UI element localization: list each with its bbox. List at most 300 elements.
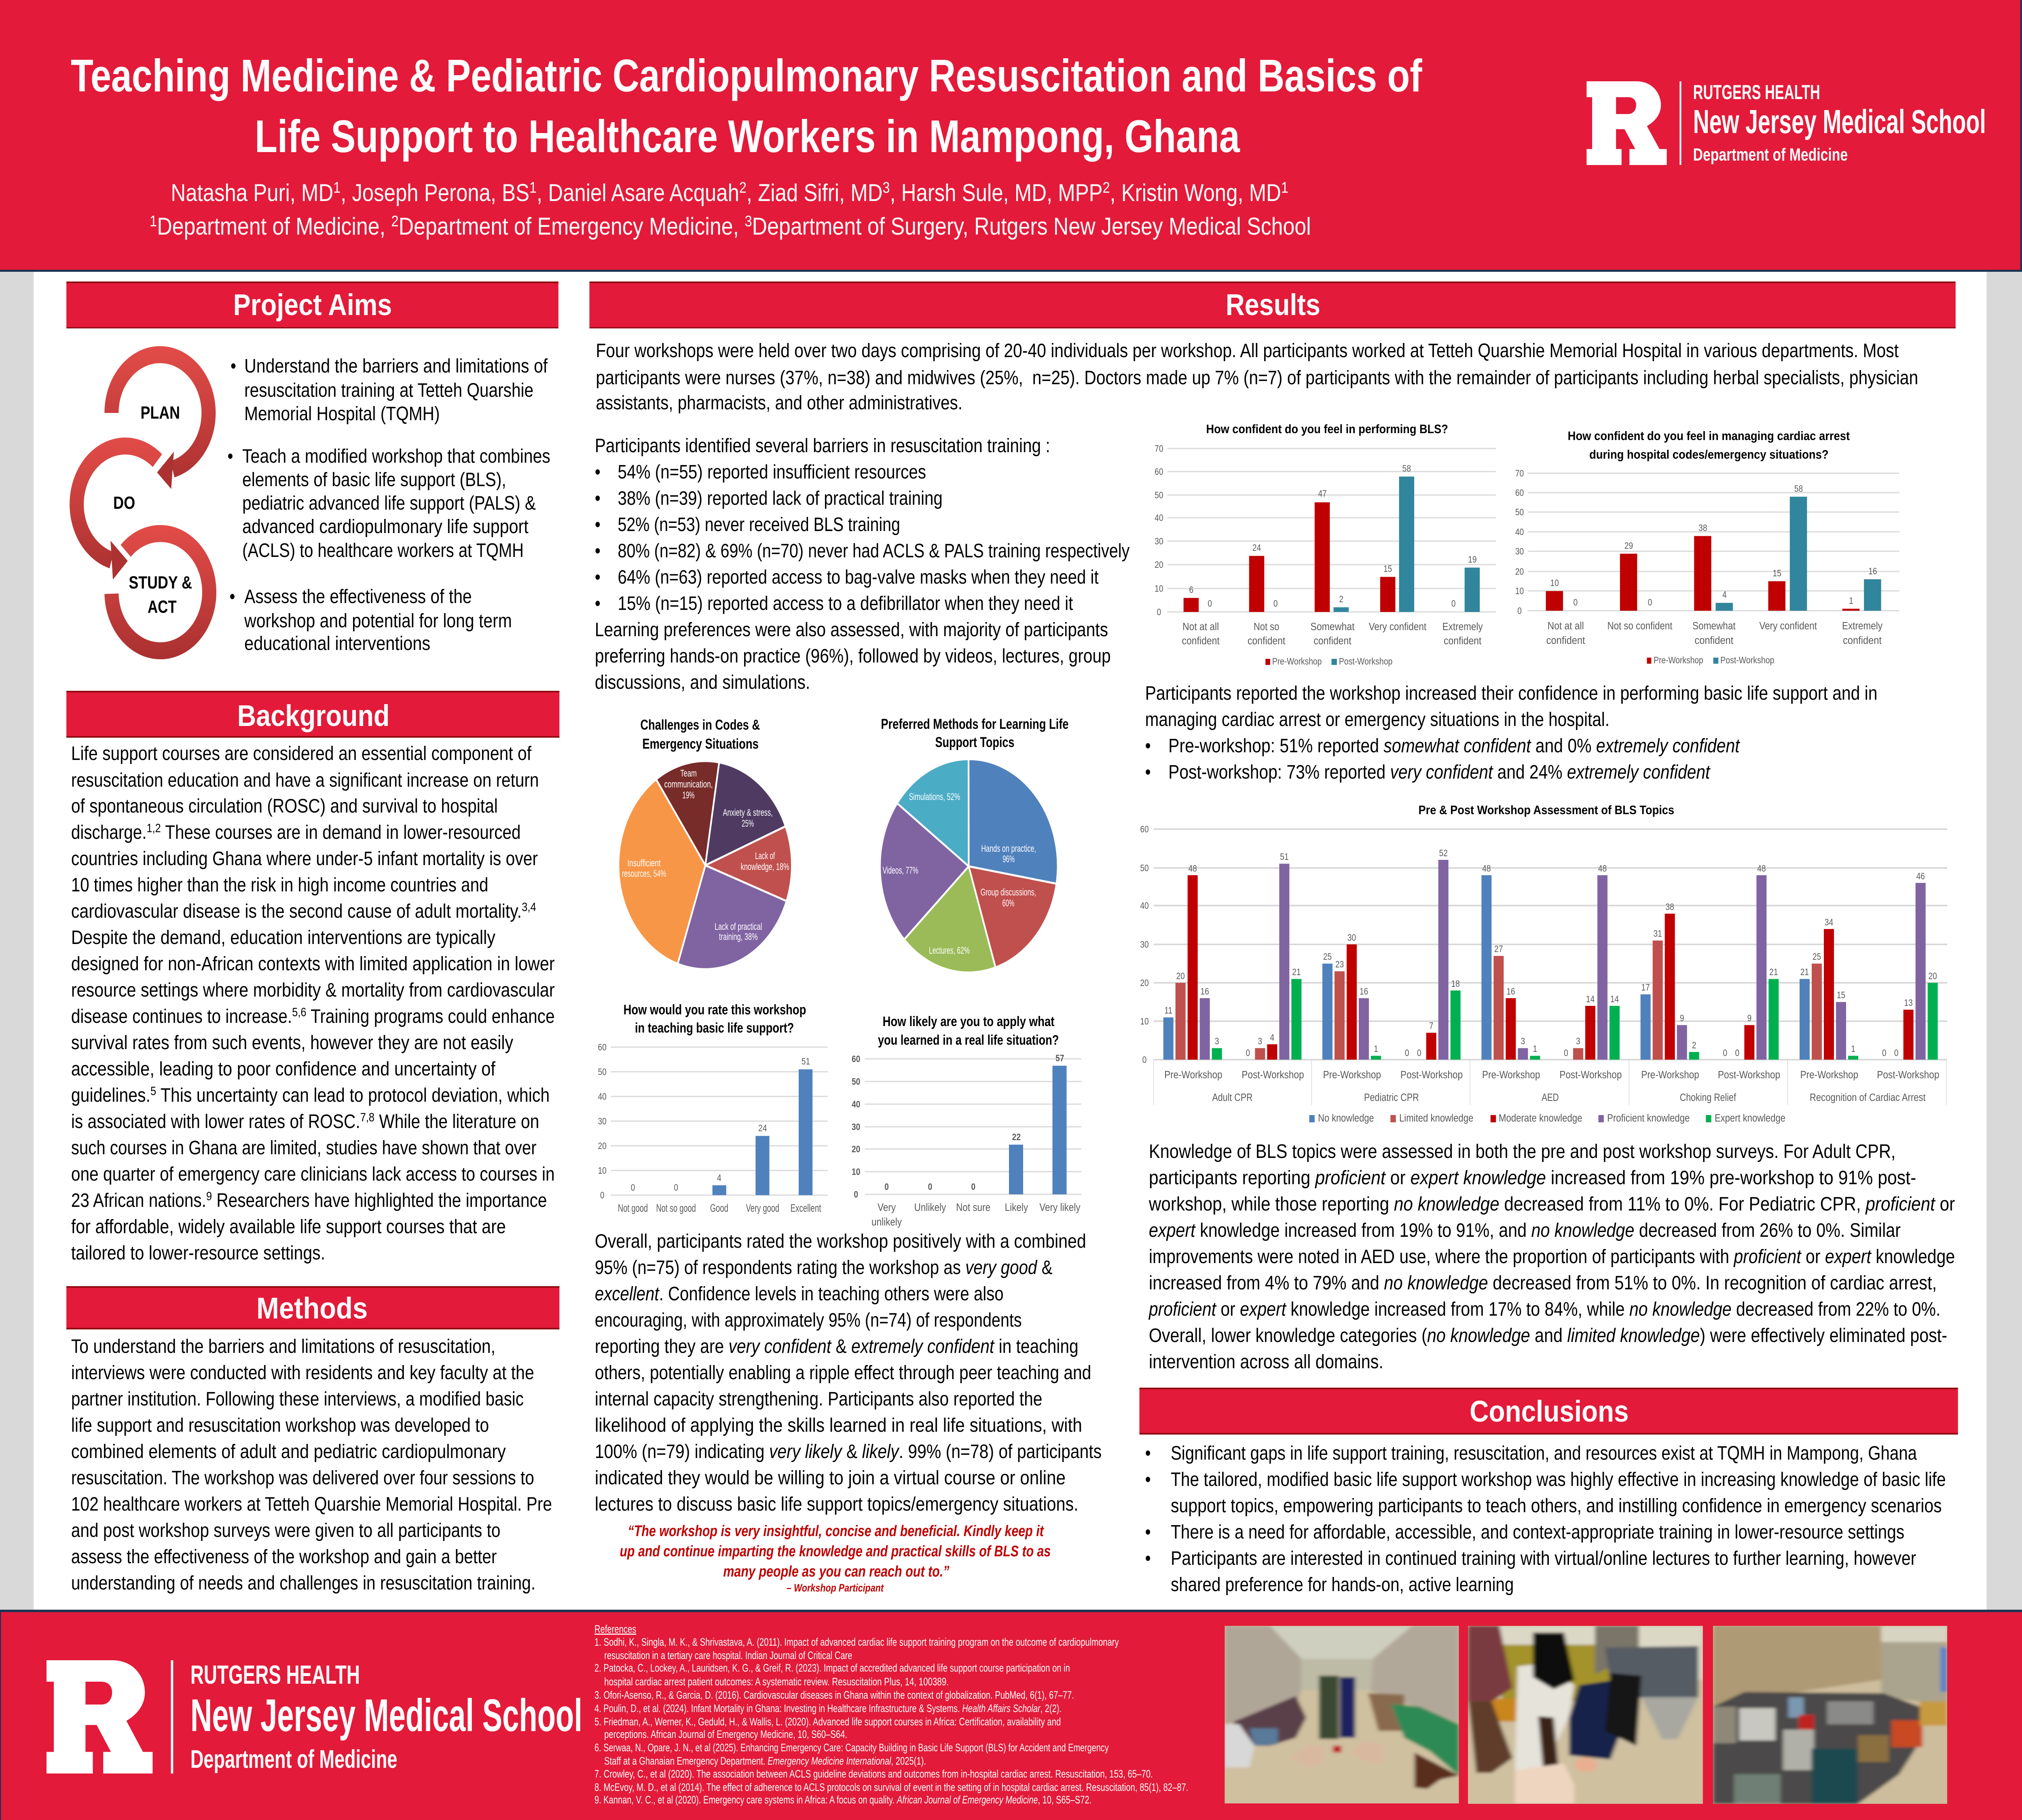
diagram: plan do study act cycle: STUDY & <box>129 572 192 593</box>
bar chart: pre and post assessment of BLS topics: 21 <box>1800 967 1809 977</box>
results intro text: assistants, pharmacists, and other administratives. <box>596 392 962 414</box>
bar chart: workshop rating: 10 <box>598 1166 607 1176</box>
bar chart: pre and post assessment of BLS topics: 3 <box>1576 1036 1580 1046</box>
background text: for affordable, widely available life support courses that are <box>71 1216 506 1238</box>
bar chart: pre and post assessment of BLS topics: 0 <box>1723 1048 1727 1058</box>
bar chart: pre and post assessment of BLS topics: 48 <box>1757 863 1766 874</box>
background text: resource settings where morbidity & mortality from cardiovascular <box>71 980 555 1001</box>
barriers list: • <box>595 593 601 614</box>
bar chart: pre and post assessment of BLS topics: Pre-Workshop <box>1482 1069 1540 1081</box>
knowledge assessment text: expert knowledge increased from 19% to 91%, and no knowledge decreased from 26% to 0%. Similar <box>1149 1220 1901 1241</box>
barriers list: • <box>595 567 601 588</box>
workshop rating text: likelihood of applying the skills learned in real life situations, with <box>595 1415 1082 1436</box>
bar chart: workshop rating: 0 <box>631 1183 635 1193</box>
bar chart: confidence performing BLS: How confident do you feel in performing BLS? <box>1206 422 1448 436</box>
bar chart: confidence performing BLS: Pre-Workshop <box>1272 656 1322 667</box>
panel: methods <box>66 1286 559 1594</box>
bar chart: confidence performing BLS: Very confident <box>1369 621 1426 633</box>
barriers list: 52% (n=53) never received BLS training <box>618 514 900 535</box>
workshop rating text: 100% (n=79) indicating very likely & likely. 99% (n=78) of participants <box>595 1441 1102 1462</box>
background text: tailored to lower-resource settings. <box>71 1242 325 1264</box>
aims bullet list: (ACLS) to healthcare workers at TQMH <box>242 540 524 561</box>
methods text: 102 healthcare workers at Tetteh Quarshie Memorial Hospital. Pre <box>71 1494 552 1515</box>
bar chart: pre and post assessment of BLS topics: 31 <box>1654 929 1662 939</box>
confidence text: Pre-workshop: 51% reported somewhat confident and 0% extremely confident <box>1168 735 1740 757</box>
bar chart: pre and post assessment of BLS topics: 1 <box>1533 1044 1537 1054</box>
photo: participants seated in training room <box>1713 1626 1947 1804</box>
bar chart: workshop rating: 4 <box>717 1173 721 1183</box>
knowledge assessment text: Overall, lower knowledge categories ( no knowledge and limited knowledge) were effectively eliminated post- <box>1149 1325 1947 1346</box>
workshop rating text: 95% (n=75) of respondents rating the workshop as very good & <box>595 1257 1052 1278</box>
diagram: plan do study act cycle: PLAN <box>141 402 180 423</box>
bar chart: confidence performing BLS: 50 <box>1155 490 1163 500</box>
workshop rating text: reporting they are very confident & extremely confident in teaching <box>595 1336 1079 1357</box>
background text: Life support courses are considered an essential component of <box>71 743 532 764</box>
bar chart: pre and post assessment of BLS topics: Moderate knowledge <box>1499 1112 1582 1124</box>
bar chart: likelihood to apply: 22 <box>1012 1132 1021 1142</box>
bar chart: pre and post assessment of BLS topics: 9 <box>1680 1013 1684 1023</box>
references: 9. Kannan, V. C., et al (2020). Emergency care systems in Africa: A focus on quality. African Journal of Emergency Medicine, 10, S65–S72. <box>594 1794 1091 1806</box>
bar chart: likelihood to apply: Likely <box>1005 1202 1028 1214</box>
bar chart: pre and post assessment of BLS topics: 40 <box>1140 901 1149 911</box>
bar chart: pre and post assessment of BLS topics: Pre & Post Workshop Assessment of BLS Topics <box>1419 803 1674 817</box>
bar chart: confidence managing cardiac arrest: 15 <box>1773 568 1781 578</box>
bar chart: pre and post assessment of BLS topics: 1 <box>1851 1044 1855 1054</box>
bar chart: pre and post assessment of BLS topics: 0 <box>1735 1048 1739 1058</box>
bar chart: pre and post assessment of BLS topics: 16 <box>1201 986 1209 997</box>
bar chart: likelihood to apply: 30 <box>852 1122 860 1132</box>
aims bullet list: workshop and potential for long term <box>244 610 512 632</box>
references: References <box>594 1623 636 1636</box>
references: resuscitation in a tertiary care hospital. Indian Journal of Critical Care <box>604 1650 852 1662</box>
panel: project aims <box>66 281 558 654</box>
bar chart: pre and post assessment of BLS topics: 3 <box>1215 1036 1219 1046</box>
pie chart: challenges in codes and emergency situations: Anxiety & stress, <box>723 807 773 818</box>
bar chart: likelihood to apply: 60 <box>852 1054 860 1064</box>
bar chart: confidence managing cardiac arrest: Not at all <box>1548 620 1584 632</box>
bar chart: likelihood to apply: Very <box>878 1202 896 1214</box>
pie chart: challenges in codes and emergency situations: Emergency Situations <box>642 736 759 752</box>
bar chart: pre and post assessment of BLS topics: 48 <box>1189 863 1197 874</box>
bar chart: pre and post assessment of BLS topics: No knowledge <box>1318 1112 1374 1124</box>
participant quote: – Workshop Participant <box>787 1582 884 1594</box>
knowledge assessment text: improvements were noted in AED use, where the proportion of participants with proficient or expert knowledge <box>1149 1246 1955 1268</box>
bar chart: likelihood to apply: 57 <box>1055 1053 1064 1063</box>
bar chart: confidence managing cardiac arrest: 58 <box>1794 484 1803 494</box>
bar chart: likelihood to apply: 40 <box>852 1099 860 1109</box>
bar chart: confidence performing BLS: Post-Workshop <box>1339 656 1392 667</box>
bar chart: confidence performing BLS: Somewhat <box>1310 621 1355 633</box>
bar chart: workshop rating: 30 <box>598 1116 607 1126</box>
bar chart: likelihood to apply: you learned in a real life situation? <box>878 1033 1059 1048</box>
bar chart: pre and post assessment of BLS topics: Limited knowledge <box>1399 1112 1473 1124</box>
bar chart: pre and post assessment of BLS topics: 14 <box>1586 994 1595 1004</box>
references: Staff at a Ghanaian Emergency Department. Emergency Medicine International, 2025(1). <box>604 1755 926 1767</box>
bar chart: likelihood to apply: 0 <box>928 1182 932 1192</box>
bar chart: likelihood to apply: How likely are you to apply what <box>883 1014 1055 1029</box>
bar chart: confidence managing cardiac arrest: 0 <box>1574 597 1578 607</box>
bar chart: pre and post assessment of BLS topics: 0 <box>1417 1048 1421 1058</box>
pie chart: challenges in codes and emergency situations: training, 38% <box>719 931 758 942</box>
bar chart: confidence managing cardiac arrest: 29 <box>1624 541 1633 551</box>
bar chart: confidence performing BLS: confident <box>1182 635 1220 647</box>
logo: Rutgers Health header <box>1586 80 1986 165</box>
aims bullet list: educational interventions <box>244 633 430 654</box>
references <box>594 1623 1188 1806</box>
bar chart: workshop rating: Excellent <box>791 1202 821 1215</box>
barriers list: Learning preferences were also assessed, with majority of participants <box>595 619 1108 641</box>
methods text: understanding of needs and challenges in resuscitation training. <box>71 1572 535 1594</box>
bar chart: pre and post assessment of BLS topics: 7 <box>1429 1021 1434 1031</box>
bar chart: confidence performing BLS: confident <box>1313 635 1352 647</box>
bar chart: pre and post assessment of BLS topics: Expert knowledge <box>1715 1112 1785 1124</box>
bar chart: pre and post assessment of BLS topics: Proficient knowledge <box>1607 1112 1690 1124</box>
bar chart: confidence performing BLS: 20 <box>1155 560 1163 570</box>
background text: of spontaneous circulation (ROSC) and survival to hospital <box>71 796 498 817</box>
background text: designed for non-African contexts with limited application in lower <box>71 953 555 975</box>
bar chart: pre and post assessment of BLS topics: Pediatric CPR <box>1364 1092 1419 1104</box>
knowledge assessment text: intervention across all domains. <box>1149 1351 1383 1373</box>
bar chart: confidence performing BLS: 0 <box>1273 599 1277 609</box>
bar chart: workshop rating: 50 <box>598 1067 607 1077</box>
bar chart: workshop rating: 51 <box>802 1056 810 1067</box>
bar chart: likelihood to apply: 0 <box>854 1189 858 1200</box>
knowledge assessment text: increased from 4% to 79% and no knowledge decreased from 51% to 0%. In recognition of cardiac arrest, <box>1149 1272 1937 1294</box>
conclusions bullets: There is a need for affordable, accessible, and context-appropriate training in lower-resource settings <box>1171 1522 1904 1543</box>
bar chart: confidence managing cardiac arrest: 16 <box>1868 566 1877 576</box>
results intro text <box>596 340 1918 414</box>
logo: Rutgers Health footer: RUTGERS HEALTH <box>190 1660 360 1689</box>
pie chart: preferred methods for learning: Group discussions, <box>981 887 1036 897</box>
title: Life Support to Healthcare Workers in Mampong, Ghana <box>255 111 1240 162</box>
pie chart: challenges in codes and emergency situations: Lack of <box>755 850 775 861</box>
pie chart: preferred methods for learning: Videos, 77% <box>883 865 918 876</box>
bar chart: pre and post assessment of BLS topics: 3 <box>1258 1036 1262 1046</box>
bar chart: pre and post assessment of BLS topics: 20 <box>1929 971 1937 981</box>
aims bullet list: Teach a modified workshop that combines <box>242 446 550 467</box>
logo: Rutgers Health header: RUTGERS HEALTH <box>1693 80 1820 104</box>
background text: Despite the demand, education interventions are typically <box>71 927 495 948</box>
heading: project aims: Project Aims <box>233 288 392 322</box>
diagram: plan do study act cycle: ACT <box>148 597 177 617</box>
bar chart: pre and post assessment of BLS topics: 51 <box>1280 852 1288 862</box>
background text: discharge.1,2 These courses are in demand in lower-resourced <box>71 821 521 843</box>
conclusions bullets: The tailored, modified basic life support workshop was highly effective in increasing knowledge of basic life <box>1171 1469 1946 1490</box>
background text: guidelines.5 This uncertainty can lead to protocol deviation, which <box>71 1084 550 1106</box>
barriers list: 38% (n=39) reported lack of practical training <box>618 488 943 509</box>
bar chart: confidence performing BLS <box>1155 422 1496 667</box>
heading: results <box>590 281 1956 328</box>
bar chart: pre and post assessment of BLS topics: Recognition of Cardiac Arrest <box>1810 1092 1926 1104</box>
bar chart: pre and post assessment of BLS topics: 13 <box>1904 998 1913 1008</box>
pie chart: challenges in codes and emergency situations: communication, <box>664 779 713 789</box>
workshop rating text: others, potentially enabling a ripple effect through peer teaching and <box>595 1362 1091 1384</box>
bar chart: confidence managing cardiac arrest: 0 <box>1517 606 1522 616</box>
aims bullet list: Assess the effectiveness of the <box>244 586 472 607</box>
knowledge assessment text <box>1148 1141 1955 1373</box>
bar chart: confidence managing cardiac arrest <box>1515 429 1899 665</box>
references: hospital cardiac arrest patient outcomes: A systematic review. Resuscitation Plus, 14, 100389. <box>604 1676 949 1688</box>
bar chart: confidence performing BLS: Extremely <box>1442 621 1483 633</box>
bar chart: confidence performing BLS: 24 <box>1252 543 1261 553</box>
pie chart: challenges in codes and emergency situations: knowledge, 18% <box>741 861 789 872</box>
heading: background <box>66 691 559 738</box>
bar chart: pre and post assessment of BLS topics: 48 <box>1598 863 1607 874</box>
bar chart: pre and post assessment of BLS topics: 9 <box>1747 1013 1751 1023</box>
pie chart: preferred methods for learning: Simulations, 52% <box>909 791 960 802</box>
pie chart: preferred methods for learning: 96% <box>1003 853 1015 864</box>
pie chart: challenges in codes and emergency situations: Insufficient <box>627 857 661 868</box>
barriers list: 15% (n=15) reported access to a defibrillator when they need it <box>618 593 1073 614</box>
bar chart: pre and post assessment of BLS topics: 4 <box>1270 1033 1274 1043</box>
heading: results: Results <box>1226 288 1320 322</box>
bar chart: confidence managing cardiac arrest: 38 <box>1698 523 1707 533</box>
bar chart: pre and post assessment of BLS topics: 30 <box>1347 933 1356 943</box>
photo: workshop room with participants <box>1225 1626 1459 1803</box>
bar chart: pre and post assessment of BLS topics: AED <box>1542 1092 1559 1104</box>
bar chart: workshop rating: 60 <box>598 1042 607 1052</box>
title: Teaching Medicine & Pediatric Cardiopulmonary Resuscitation and Basics of <box>71 51 1422 102</box>
bar chart: pre and post assessment of BLS topics: 0 <box>1894 1048 1899 1058</box>
pie chart: preferred methods for learning: Preferred Methods for Learning Life <box>881 716 1069 732</box>
references: 5. Friedman, A., Werner, K., Geduld, H., & Wallis, L. (2020). Advanced life support courses in Africa: Certification, availability and <box>594 1716 1061 1728</box>
confidence text: Participants reported the workshop increased their confidence in performing basic life support and in <box>1145 683 1877 704</box>
pie chart: preferred methods for learning: Support Topics <box>935 734 1014 750</box>
knowledge assessment text: workshop, while those reporting no knowledge decreased from 11% to 0%. For Pediatric CPR, proficient or <box>1148 1194 1955 1215</box>
workshop rating text: encouraging, with approximately 95% (n=74) of respondents <box>595 1310 1022 1331</box>
bar chart: pre and post assessment of BLS topics: 38 <box>1666 902 1674 912</box>
references: 6. Serwaa, N., Opare, J. N., et al (2025). Enhancing Emergency Care: Capacity Building in Basic Life Support (BLS) for Accident and Emergency <box>594 1742 1109 1754</box>
bar chart: confidence performing BLS: 19 <box>1468 554 1476 565</box>
conclusions bullets: • <box>1145 1548 1151 1569</box>
bar chart: confidence managing cardiac arrest: 0 <box>1648 597 1652 607</box>
barriers list: • <box>595 461 601 483</box>
bar chart: pre and post assessment of BLS topics: 21 <box>1292 967 1301 977</box>
bar chart: confidence managing cardiac arrest: during hospital codes/emergency situations? <box>1589 448 1829 462</box>
conclusions bullets: Participants are interested in continued training with virtual/online lectures to further learning, however <box>1171 1548 1916 1569</box>
bar chart: workshop rating: 20 <box>598 1141 607 1151</box>
heading: methods <box>66 1286 559 1329</box>
pie chart: challenges in codes and emergency situations: Team <box>680 768 697 779</box>
bar chart: confidence managing cardiac arrest: 50 <box>1515 507 1524 517</box>
pie chart: preferred methods for learning: 60% <box>1002 897 1014 908</box>
bar chart: pre and post assessment of BLS topics: 30 <box>1140 940 1149 950</box>
aims bullet list: • <box>231 356 236 377</box>
methods text: assess the effectiveness of the workshop and gain a better <box>71 1546 497 1568</box>
aims bullet list: Memorial Hospital (TQMH) <box>244 403 440 425</box>
bar chart: confidence managing cardiac arrest: Not so confident <box>1607 620 1673 632</box>
bar chart: confidence managing cardiac arrest: Somewhat <box>1692 620 1736 632</box>
bar chart: pre and post assessment of BLS topics: 48 <box>1482 863 1491 874</box>
barriers list: preferring hands-on practice (96%), followed by videos, lectures, group <box>595 645 1111 667</box>
bar chart: confidence managing cardiac arrest: 60 <box>1515 488 1524 498</box>
bar chart: pre and post assessment of BLS topics: 17 <box>1641 982 1650 993</box>
bar chart: workshop rating: Not so good <box>656 1202 696 1215</box>
references: perceptions. African Journal of Emergency Medicine, 10, S60–S64. <box>604 1729 847 1741</box>
diagram: plan do study act cycle <box>77 355 209 651</box>
barriers list: 80% (n=82) & 69% (n=70) never had ACLS & PALS training respectively <box>618 540 1129 562</box>
bar chart: confidence performing BLS: 0 <box>1157 607 1161 617</box>
bar chart: confidence performing BLS: 70 <box>1155 444 1163 454</box>
header banner <box>0 0 2022 272</box>
bar chart: pre and post assessment of BLS topics: 50 <box>1140 863 1149 873</box>
bar chart: confidence performing BLS: 15 <box>1383 564 1392 574</box>
logo: Rutgers Health footer: New Jersey Medical School <box>190 1690 582 1741</box>
methods text: To understand the barriers and limitations of resuscitation, <box>71 1336 495 1357</box>
references: 8. McEvoy, M. D., et al (2014). The effect of adherence to ACLS protocols on survival of event in the setting of in hospital cardiac arrest. Resuscitation, 85(1), 82–87. <box>594 1782 1188 1794</box>
pie chart: preferred methods for learning: Hands on practice, <box>981 843 1036 854</box>
results intro text: participants were nurses (37%, n=38) and midwives (25%, n=25). Doctors made up 7% (n=7) of participants with the remainder of participants including herbal specialists, physician <box>596 367 1918 389</box>
bar chart: likelihood to apply: Not sure <box>956 1202 990 1214</box>
participant quote: “The workshop is very insightful, concise and beneficial. Kindly keep it <box>628 1522 1044 1540</box>
bar chart: pre and post assessment of BLS topics: 1 <box>1374 1044 1378 1054</box>
confidence text: managing cardiac arrest or emergency situations in the hospital. <box>1145 709 1610 730</box>
authors and affiliations: Natasha Puri, MD1, Joseph Perona, BS1, Daniel Asare Acquah2, Ziad Sifri, MD3, Harsh Sule, MD, MPP2, Kristin Wong, MD1 <box>171 179 1288 206</box>
bar chart: confidence managing cardiac arrest: Post-Workshop <box>1720 655 1775 665</box>
bar chart: confidence performing BLS: 30 <box>1155 536 1163 546</box>
knowledge assessment text: proficient or expert knowledge increased from 17% to 84%, while no knowledge decreased from 22% to 0%. <box>1148 1299 1940 1320</box>
panel: background <box>66 691 559 1264</box>
knowledge assessment text: participants reporting proficient or expert knowledge increased from 19% pre-workshop to 91% post- <box>1149 1167 1916 1189</box>
bar chart: likelihood to apply: Unlikely <box>914 1202 946 1214</box>
references: 7. Crowley, C., et al (2020). The association between ACLS guideline deviations and outcomes from in-hospital cardiac arrest. Resuscitation, 153, 65–70. <box>594 1768 1153 1780</box>
references: 3. Ofori-Asenso, R., & Garcia, D. (2016). Cardiovascular diseases in Ghana within the context of globalization. PubMed, 6(1), 67–77. <box>594 1689 1074 1701</box>
pie chart: preferred methods for learning: Lectures, 62% <box>929 945 970 956</box>
bar chart: pre and post assessment of BLS topics: Post-Workshop <box>1559 1069 1622 1081</box>
barriers list: 64% (n=63) reported access to bag-valve masks when they need it <box>618 567 1099 588</box>
bar chart: confidence managing cardiac arrest: 10 <box>1550 578 1559 588</box>
bar chart: pre and post assessment of BLS topics: 34 <box>1825 917 1833 927</box>
bar chart: pre and post assessment of BLS topics: 21 <box>1769 967 1778 977</box>
bar chart: confidence managing cardiac arrest: 4 <box>1722 590 1727 600</box>
pie chart: challenges in codes and emergency situations: Challenges in Codes & <box>640 717 760 733</box>
bar chart: pre and post assessment of BLS topics: 27 <box>1494 944 1503 954</box>
barriers list: • <box>595 540 601 562</box>
logo: Rutgers Health footer: Department of Medicine <box>190 1746 398 1773</box>
workshop rating text: Overall, participants rated the workshop positively with a combined <box>595 1231 1086 1252</box>
bar chart: confidence managing cardiac arrest: 1 <box>1849 596 1853 606</box>
bar chart: pre and post assessment of BLS topics: 52 <box>1439 848 1448 858</box>
bar chart: pre and post assessment of BLS topics: 0 <box>1564 1048 1568 1058</box>
authors and affiliations: 1Department of Medicine, 2Department of Emergency Medicine, 3Department of Surgery, Rutgers New Jersey Medical School <box>150 212 1311 240</box>
background text: accessible, leading to poor confidence and uncertainty of <box>71 1058 496 1080</box>
bar chart: confidence managing cardiac arrest: Pre-Workshop <box>1654 655 1703 665</box>
barriers list: • <box>595 488 601 509</box>
background text: such courses in Ghana are limited, studies have shown that over <box>71 1137 537 1159</box>
confidence text: • <box>1145 762 1151 783</box>
background text: resuscitation education and have a significant increase on return <box>71 770 539 791</box>
bar chart: confidence performing BLS: 58 <box>1402 463 1411 474</box>
conclusions bullets <box>1145 1443 1946 1596</box>
bar chart: confidence performing BLS: 0 <box>1208 599 1212 609</box>
background text: disease continues to increase. 5,6 Training programs could enhance <box>71 1005 555 1027</box>
methods text <box>71 1336 552 1594</box>
bar chart: pre and post assessment of BLS topics: 2 <box>1692 1040 1696 1050</box>
bar chart: pre and post assessment of BLS topics: 10 <box>1140 1016 1149 1026</box>
bar chart: confidence managing cardiac arrest: 40 <box>1515 527 1524 537</box>
bar chart: workshop rating <box>598 1002 828 1215</box>
background text: is associated with lower rates of ROSC. 7,8 While the literature on <box>71 1110 539 1132</box>
bar chart: workshop rating: 40 <box>598 1092 607 1102</box>
bar chart: likelihood to apply: 0 <box>971 1182 975 1192</box>
bar chart: likelihood to apply: 10 <box>852 1167 860 1177</box>
bar chart: workshop rating: 0 <box>600 1190 604 1200</box>
bar chart: workshop rating: How would you rate this workshop <box>624 1002 806 1018</box>
confidence text: • <box>1145 735 1151 757</box>
heading: background: Background <box>237 699 389 732</box>
bar chart: pre and post assessment of BLS topics: 25 <box>1323 952 1332 962</box>
bar chart: confidence managing cardiac arrest: How confident do you feel in managing cardiac arrest <box>1568 429 1850 443</box>
methods text: resuscitation. The workshop was delivered over four sessions to <box>71 1467 534 1489</box>
bar chart: workshop rating: in teaching basic life support? <box>635 1020 794 1036</box>
conclusions bullets: • <box>1145 1522 1151 1543</box>
bar chart: likelihood to apply: 20 <box>852 1144 860 1154</box>
bar chart: workshop rating: Not good <box>618 1202 648 1215</box>
bar chart: confidence performing BLS: 0 <box>1451 599 1456 609</box>
workshop rating text <box>595 1231 1102 1515</box>
barriers list <box>595 435 1129 693</box>
methods text: life support and resuscitation workshop was developed to <box>71 1415 489 1436</box>
photo: CPR practice on manikin <box>1468 1626 1703 1804</box>
aims bullet list: resuscitation training at Tetteh Quarshie <box>244 380 533 401</box>
aims bullet list: elements of basic life support (BLS), <box>242 469 506 491</box>
bar chart: pre and post assessment of BLS topics: 46 <box>1916 871 1925 881</box>
references: 4. Poulin, D., et al. (2024). Infant Mortality in Ghana: Investing in Healthcare Infrastructure & Systems. Health Affairs Scholar, 2(2). <box>594 1703 1062 1715</box>
heading: project aims <box>66 281 558 328</box>
bar chart: confidence performing BLS: 6 <box>1189 585 1193 595</box>
panel: conclusions <box>1140 1388 1958 1596</box>
bar chart: likelihood to apply <box>852 1014 1081 1228</box>
bar chart: confidence managing cardiac arrest: 10 <box>1515 586 1524 596</box>
results intro text: Four workshops were held over two days comprising of 20-40 individuals per workshop. All participants worked at Tetteh Quarshie Memorial Hospital in various departments. Most <box>596 340 1899 362</box>
bar chart: pre and post assessment of BLS topics <box>1140 803 1947 1124</box>
conclusions bullets: Significant gaps in life support training, resuscitation, and resources exist at TQMH in Mampong, Ghana <box>1171 1443 1917 1464</box>
bar chart: confidence managing cardiac arrest: Very confident <box>1759 620 1817 632</box>
pie chart: challenges in codes and emergency situations: 19% <box>683 789 695 800</box>
pie chart: challenges in codes and emergency situations: resources, 54% <box>622 868 666 879</box>
bar chart: pre and post assessment of BLS topics: 0 <box>1246 1048 1250 1058</box>
confidence text <box>1145 683 1877 783</box>
workshop rating text: internal capacity strengthening. Participants also reported the <box>595 1388 1043 1410</box>
bar chart: pre and post assessment of BLS topics: 60 <box>1140 824 1149 834</box>
conclusions bullets: • <box>1145 1443 1151 1464</box>
bar chart: workshop rating: Very good <box>746 1202 779 1215</box>
bar chart: confidence managing cardiac arrest: confident <box>1546 635 1585 647</box>
bar chart: confidence managing cardiac arrest: 30 <box>1515 546 1524 557</box>
workshop rating text: lectures to discuss basic life support topics/emergency situations. <box>595 1494 1079 1515</box>
aims bullet list: pediatric advanced life support (PALS) & <box>242 493 536 514</box>
bar chart: confidence performing BLS: confident <box>1444 635 1482 647</box>
background text <box>71 743 555 1264</box>
title <box>71 51 1422 162</box>
barriers list: • <box>595 514 601 535</box>
bar chart: workshop rating: 0 <box>674 1183 678 1193</box>
bar chart: confidence performing BLS: 47 <box>1318 489 1327 499</box>
bar chart: pre and post assessment of BLS topics: Post-Workshop <box>1400 1069 1463 1081</box>
bar chart: confidence performing BLS: 60 <box>1155 467 1163 477</box>
bar chart: likelihood to apply: Very likely <box>1039 1202 1081 1214</box>
methods text: interviews were conducted with residents and key faculty at the <box>71 1362 534 1384</box>
pie chart: challenges in codes and emergency situations: Lack of practical <box>715 921 762 932</box>
background text: cardiovascular disease is the second cause of adult mortality. 3,4 <box>71 900 536 922</box>
bar chart: confidence performing BLS: confident <box>1248 635 1286 647</box>
bar chart: pre and post assessment of BLS topics: 0 <box>1882 1048 1887 1058</box>
bar chart: pre and post assessment of BLS topics: 23 <box>1335 959 1344 969</box>
bar chart: pre and post assessment of BLS topics: 11 <box>1164 1005 1172 1016</box>
background text: survival rates from such events, however they are not easily <box>71 1032 513 1054</box>
bar chart: pre and post assessment of BLS topics: Adult CPR <box>1212 1092 1253 1104</box>
bar chart: pre and post assessment of BLS topics: Post-Workshop <box>1242 1069 1304 1081</box>
